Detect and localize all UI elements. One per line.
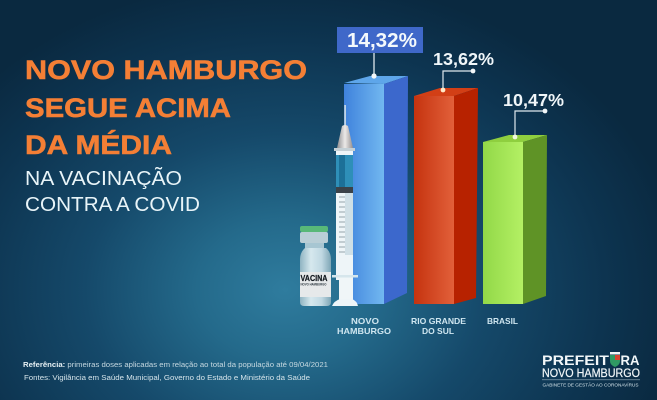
value label: 14,32% [337, 27, 423, 79]
value label: 10,47%: 10,47% [503, 90, 564, 110]
footnote: sources: Fontes: Vigilância em Saúde Municipal, Governo do Estado e Ministério da Saúde [24, 375, 310, 382]
footnote: reference: Referência: primeiras doses aplicadas em relação ao total da população até 09/04/2021 [23, 362, 328, 369]
subtitle: NA VACINAÇÃO [25, 166, 182, 190]
bar: Novo Hamburgo [344, 76, 408, 304]
title: DA MÉDIA [25, 129, 172, 160]
subtitle [25, 166, 200, 216]
category label: Novo Hamburgo [337, 316, 392, 336]
category label: Brasil: BRASIL [487, 316, 518, 326]
icon: vaccine vial [300, 226, 331, 306]
value label: 13,62% [433, 49, 494, 92]
category label: Rio Grande do Sul [411, 316, 466, 336]
logo: Prefeitura Novo Hamburgo: PREFEIT [542, 352, 609, 368]
icon: syringe [332, 105, 358, 306]
category label: Novo Hamburgo: HAMBURGO [337, 326, 392, 336]
title [25, 55, 307, 160]
category label: Rio Grande do Sul: DO SUL [422, 326, 454, 336]
value label: 10,47% [503, 90, 564, 139]
logo: Prefeitura Novo Hamburgo: RA [620, 352, 640, 368]
category label: Rio Grande do Sul: RIO GRANDE [411, 316, 466, 326]
bar: Rio Grande do Sul [414, 88, 478, 304]
title: NOVO HAMBURGO [25, 55, 307, 85]
icon: vaccine vial: NOVO HAMBURGO [300, 282, 327, 286]
value label: 13,62%: 13,62% [433, 49, 494, 69]
subtitle: CONTRA A COVID [25, 194, 200, 216]
logo: Prefeitura Novo Hamburgo: GABINETE DE GESTÃO AO CORONAVÍRUS [542, 382, 638, 388]
title: SEGUE ACIMA [25, 93, 231, 123]
vial label: VACINA [300, 274, 328, 283]
value label: 14,32%: 14,32% [347, 30, 417, 52]
logo: Prefeitura Novo Hamburgo [542, 352, 640, 388]
category label: Novo Hamburgo: NOVO [351, 316, 380, 326]
logo: Prefeitura Novo Hamburgo: NOVO HAMBURGO [542, 368, 640, 380]
bar: Brasil [483, 135, 547, 304]
crest [610, 352, 620, 367]
